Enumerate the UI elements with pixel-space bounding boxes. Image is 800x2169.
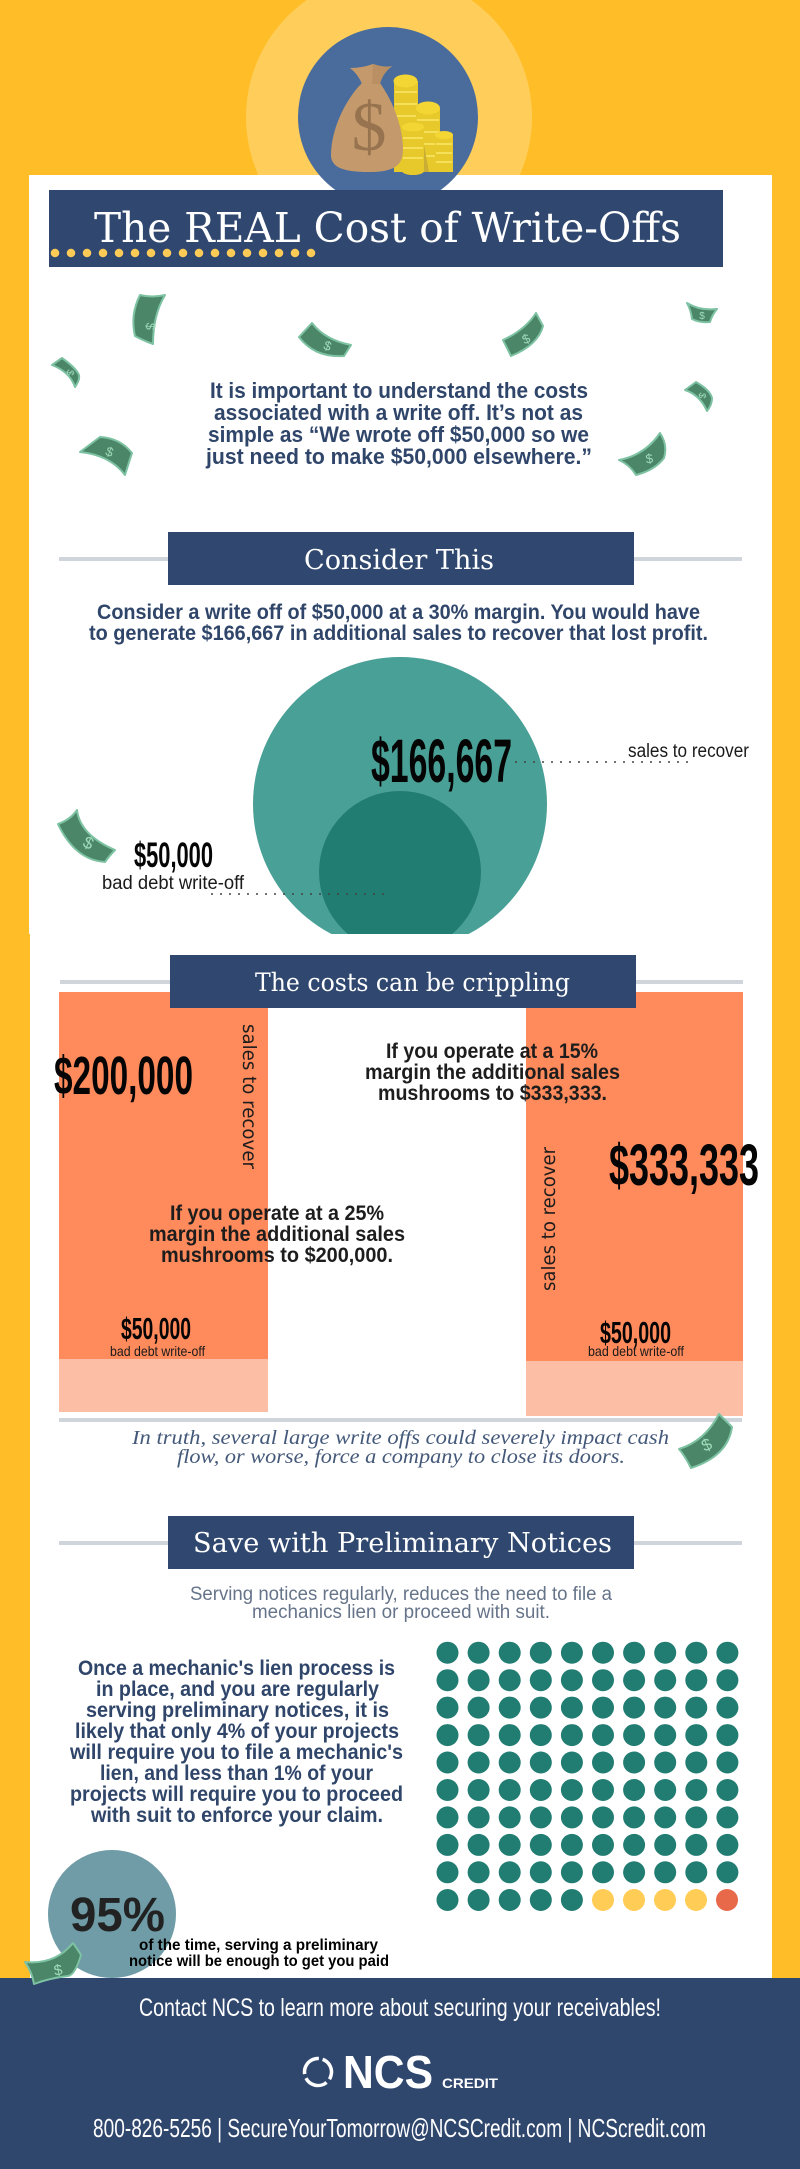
text: 15% margin: If you operate at a 15% [386, 1040, 598, 1063]
text: 15% margin: margin the additional sales [365, 1061, 620, 1084]
falling money bills: $ [644, 450, 655, 467]
section heading: costs: The costs can be crippling [255, 968, 570, 997]
section heading: costs [60, 955, 743, 1008]
intro text: It is important to understand the costs [210, 378, 588, 403]
intro text: simple as “We wrote off $50,000 so we [208, 422, 589, 447]
left write-off label [110, 1311, 205, 1359]
notices intro: mechanics lien or proceed with suit. [252, 1602, 550, 1623]
title bar [49, 190, 723, 267]
consider paragraph [89, 601, 708, 645]
text: 15% margin [365, 1040, 620, 1105]
label: sales to recover, left: sales to recover [238, 1024, 260, 1169]
callout: bad debt write-off [102, 836, 387, 894]
consider paragraph: to generate $166,667 in additional sales to recover that lost profit. [89, 622, 708, 645]
95 percent caption [129, 1937, 389, 1970]
lien paragraph: projects will require you to proceed [70, 1783, 403, 1806]
falling money bills: $ [143, 322, 158, 331]
lien paragraph: lien, and less than 1% of your [100, 1762, 373, 1785]
callout: sales to recover: $166,667 [371, 727, 512, 795]
NCS Credit logo: CREDIT [442, 2075, 498, 2091]
falling money bills: $ [695, 392, 707, 400]
section heading: Consider This [59, 532, 742, 585]
callout: sales to recover [371, 727, 750, 795]
text: 15% margin: mushrooms to $333,333. [378, 1082, 607, 1105]
icon: money bill: $ [698, 1434, 715, 1456]
italic conclusion: In truth, several large write offs could severely impact cash [131, 1427, 669, 1449]
white content panel [29, 175, 772, 1980]
text: 25% margin: If you operate at a 25% [170, 1202, 384, 1225]
icon: money bill [58, 810, 115, 862]
icon: money bag and coins: $ [352, 89, 386, 166]
left write-off label: bad debt write-off [110, 1343, 205, 1359]
bar: 25% margin [59, 992, 268, 1412]
95 percent circle [48, 1850, 176, 1978]
notices intro: Serving notices regularly, reduces the need to file a [190, 1584, 612, 1605]
notices intro [190, 1584, 612, 1623]
right write-off label [588, 1315, 684, 1359]
dotted accent [55, 249, 313, 257]
right write-off label: bad debt write-off [588, 1343, 684, 1359]
falling money bills: $ [520, 330, 533, 347]
bar: 15% margin [526, 992, 743, 1416]
section heading: preliminary notices: Save with Preliminary Notices [193, 1528, 612, 1559]
falling money bills: $ [699, 311, 705, 322]
lien paragraph: serving preliminary notices, it is [86, 1699, 389, 1722]
pale halo circle [246, 0, 532, 260]
95 percent circle: 95% [70, 1889, 165, 1942]
NCS Credit logo: NCS [343, 2046, 433, 2098]
icon: money bill: $ [53, 1961, 64, 1980]
icon: money bill: $ [80, 832, 97, 854]
lien paragraph [69, 1657, 403, 1827]
dot grid chart [448, 1653, 738, 1911]
label: sales to recover, right: sales to recover [538, 1147, 560, 1291]
right write-off label: $50,000 [600, 1315, 671, 1350]
left write-off label: $50,000 [121, 1311, 191, 1346]
lien paragraph: will require you to file a mechanic's [69, 1741, 403, 1764]
falling money bills: $ [63, 369, 75, 377]
falling money bills: $ [104, 443, 116, 460]
NCS Credit logo [301, 2046, 498, 2098]
intro text: associated with a write off. It’s not as [214, 400, 583, 425]
chart: nested circles [253, 657, 547, 953]
contact line: Contact NCS to learn more about securing your receivables! [139, 1994, 661, 2022]
section heading: Consider This: Consider This [304, 545, 494, 576]
falling money bills [52, 295, 717, 475]
icon: money bag and coins [298, 27, 478, 207]
icon: money bill [679, 1414, 732, 1468]
value: $200,000: $200,000 [54, 1046, 193, 1106]
footer band [0, 1978, 800, 2169]
title: The REAL Cost of Write-Offs [94, 204, 681, 252]
section heading: preliminary notices [59, 1516, 742, 1569]
text: 25% margin [149, 1202, 405, 1267]
text: 25% margin: margin the additional sales [149, 1223, 405, 1246]
callout: sales to recover: sales to recover [628, 741, 750, 762]
lien paragraph: Once a mechanic's lien process is [78, 1657, 395, 1680]
lien paragraph: with suit to enforce your claim. [90, 1804, 383, 1827]
callout: bad debt write-off: bad debt write-off [102, 873, 245, 894]
italic conclusion: flow, or worse, force a company to close its doors. [177, 1446, 625, 1468]
95 percent caption: of the time, serving a preliminary [139, 1937, 378, 1954]
intro text: just need to make $50,000 elsewhere.” [205, 444, 592, 469]
95 percent caption: notice will be enough to get you paid [129, 1953, 389, 1970]
consider paragraph: Consider a write off of $50,000 at a 30% margin. You would have [97, 601, 700, 624]
text: 25% margin: mushrooms to $200,000. [161, 1244, 393, 1267]
lien paragraph: likely that only 4% of your projects [75, 1720, 399, 1743]
callout: bad debt write-off: $50,000 [134, 836, 213, 875]
intro text [205, 378, 592, 469]
icon: money bill [25, 1943, 81, 1984]
falling money bills: $ [322, 337, 334, 354]
italic conclusion [131, 1427, 669, 1468]
lien paragraph: in place, and you are regularly [96, 1678, 379, 1701]
